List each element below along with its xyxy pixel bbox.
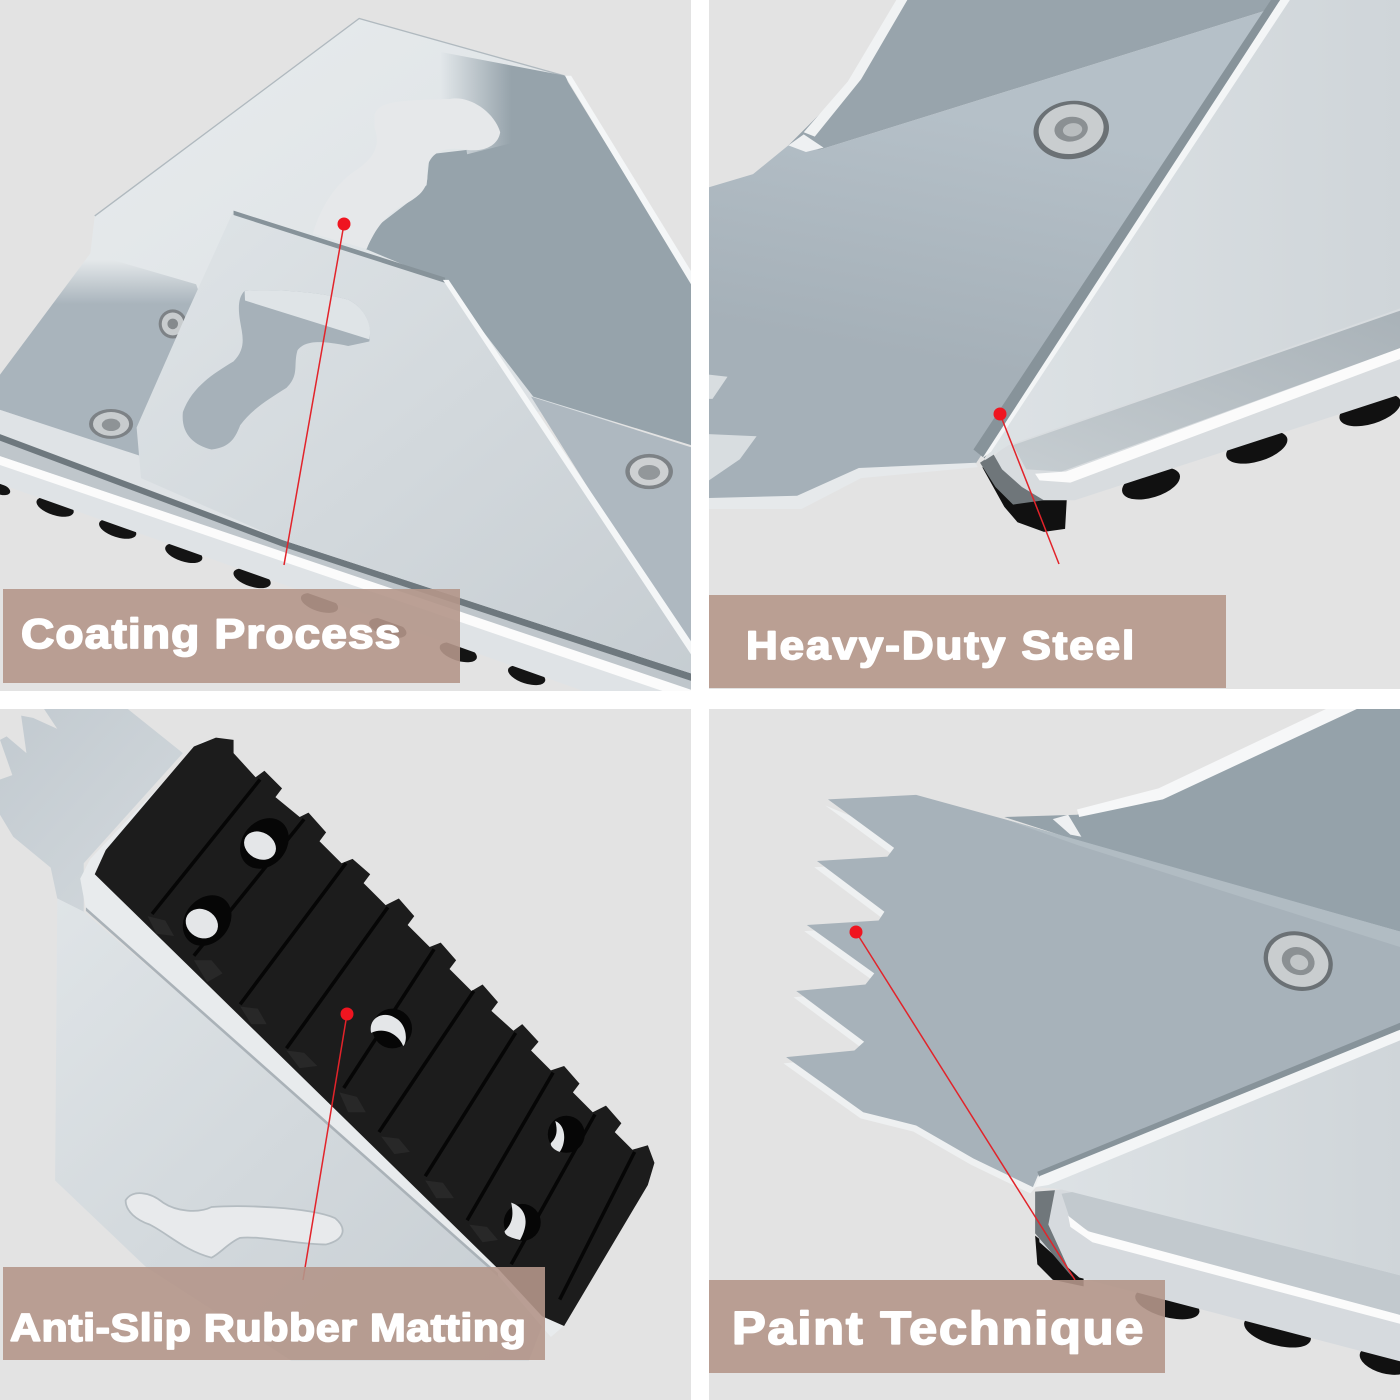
front plate (136, 268, 691, 674)
label: coating process (3, 589, 460, 683)
rivet small (159, 309, 187, 338)
label: coating process: Coating Process (21, 611, 401, 658)
back plate (306, 20, 612, 422)
front keyhole (183, 290, 370, 450)
rivet right (625, 454, 673, 489)
rivet left (89, 409, 133, 439)
rail (0, 410, 544, 678)
tooth notches (709, 375, 757, 480)
mat stud holes (173, 808, 585, 1241)
side plate (984, 0, 1400, 461)
label: heavy-duty steel (709, 595, 1226, 688)
toothed plate (786, 795, 1400, 1187)
panel: paint technique (709, 709, 1400, 1400)
panel: coating process (0, 0, 691, 701)
pointer dot and line (994, 408, 1059, 564)
label: paint technique: Paint Technique (732, 1303, 1143, 1354)
rail (1035, 1189, 1400, 1361)
pointer dot and line (284, 218, 350, 565)
tooth rim (783, 806, 1103, 1193)
plate lower rim (709, 462, 976, 500)
label: anti-slip rubber matting: Anti-Slip Rubber Matting (10, 1306, 526, 1350)
side plate (1037, 1037, 1400, 1275)
pointer dot and line (850, 926, 1075, 1280)
rivet (1255, 922, 1341, 1000)
rail (991, 308, 1400, 500)
floor plate (0, 266, 198, 456)
rubber feet (1035, 1236, 1400, 1380)
label: anti-slip rubber matting (3, 1267, 545, 1360)
mat edge blocks (148, 916, 498, 1242)
side plate slot (126, 1193, 343, 1258)
panel: anti-slip rubber matting (0, 709, 691, 1400)
mat studs (180, 826, 564, 1240)
rubber feet (982, 387, 1400, 532)
floor plate right (531, 397, 691, 652)
mat grooves (152, 780, 635, 1300)
label: paint technique (709, 1280, 1165, 1373)
back keyhole (366, 98, 500, 249)
rubber mat (95, 738, 654, 1326)
label: heavy-duty steel: Heavy-Duty Steel (746, 623, 1134, 668)
pointer dot and line (303, 1008, 354, 1280)
rubber feet (0, 481, 548, 689)
upper fold (1004, 709, 1400, 932)
side plate (55, 965, 529, 1360)
flat plate (709, 11, 1264, 500)
toothed blade (0, 709, 183, 912)
rivet (1034, 100, 1109, 160)
back plate shaded face (366, 76, 691, 445)
upper fold (788, 0, 1282, 150)
rail edge (80, 741, 566, 1337)
panel: heavy-duty steel (709, 0, 1400, 689)
